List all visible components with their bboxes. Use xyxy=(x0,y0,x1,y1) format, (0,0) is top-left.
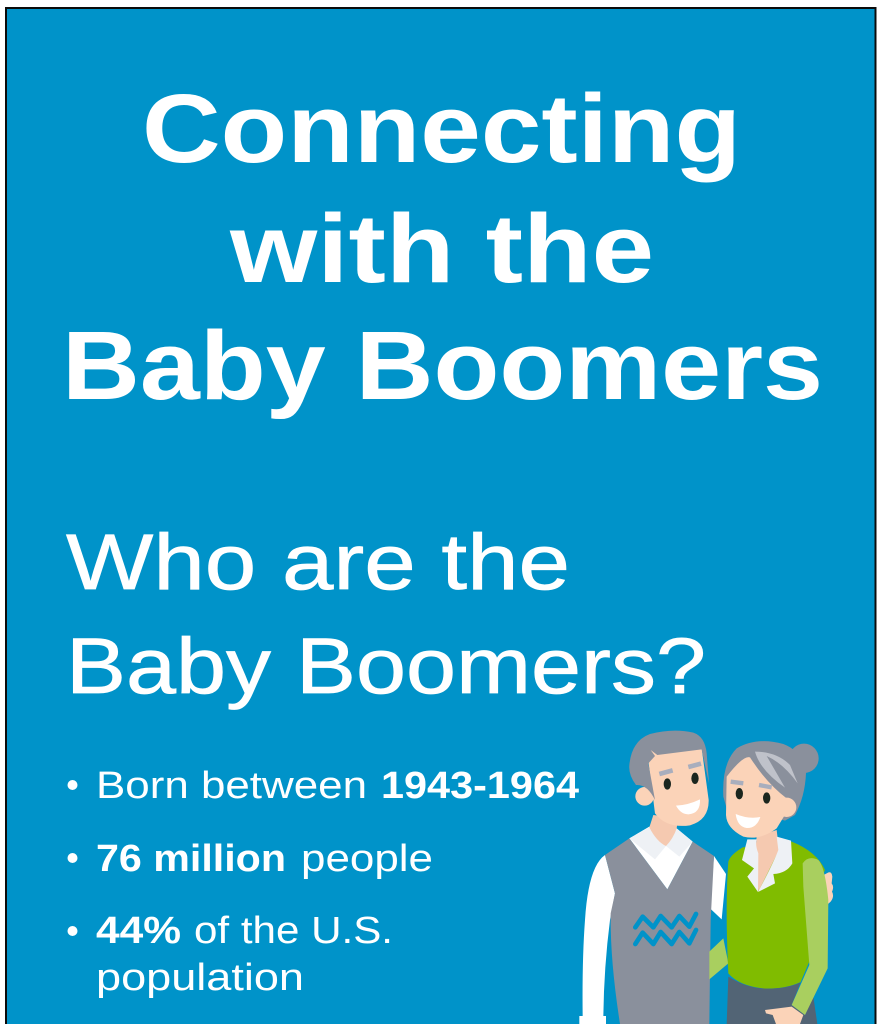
bullet: population share: of the U.S. xyxy=(194,910,393,952)
bullet: population share xyxy=(68,910,393,999)
bullet: population count: people xyxy=(301,838,433,880)
bullet: population share: population xyxy=(96,957,304,999)
heading: who are the baby boomers xyxy=(66,517,706,710)
woman xyxy=(709,741,833,1024)
title: with the xyxy=(229,194,654,303)
bullet list xyxy=(68,765,579,999)
bullet: population count: 76 million xyxy=(96,838,286,880)
heading: who are the baby boomers: Who are the xyxy=(66,517,570,606)
bullet: birth years: 1943-1964 xyxy=(381,765,579,807)
bullet: population share: 44% xyxy=(96,910,181,952)
vest zigzag pattern xyxy=(635,914,696,944)
heading: who are the baby boomers: Baby Boomers? xyxy=(66,621,706,710)
title: Baby Boomers xyxy=(62,311,823,420)
bullet: birth years xyxy=(68,765,579,807)
bullet: birth years: Born between xyxy=(96,765,367,807)
title: Connecting xyxy=(142,74,741,183)
title xyxy=(62,74,823,420)
bullet: population count xyxy=(68,838,433,880)
illustration: older couple xyxy=(579,731,833,1024)
man xyxy=(579,731,726,1024)
